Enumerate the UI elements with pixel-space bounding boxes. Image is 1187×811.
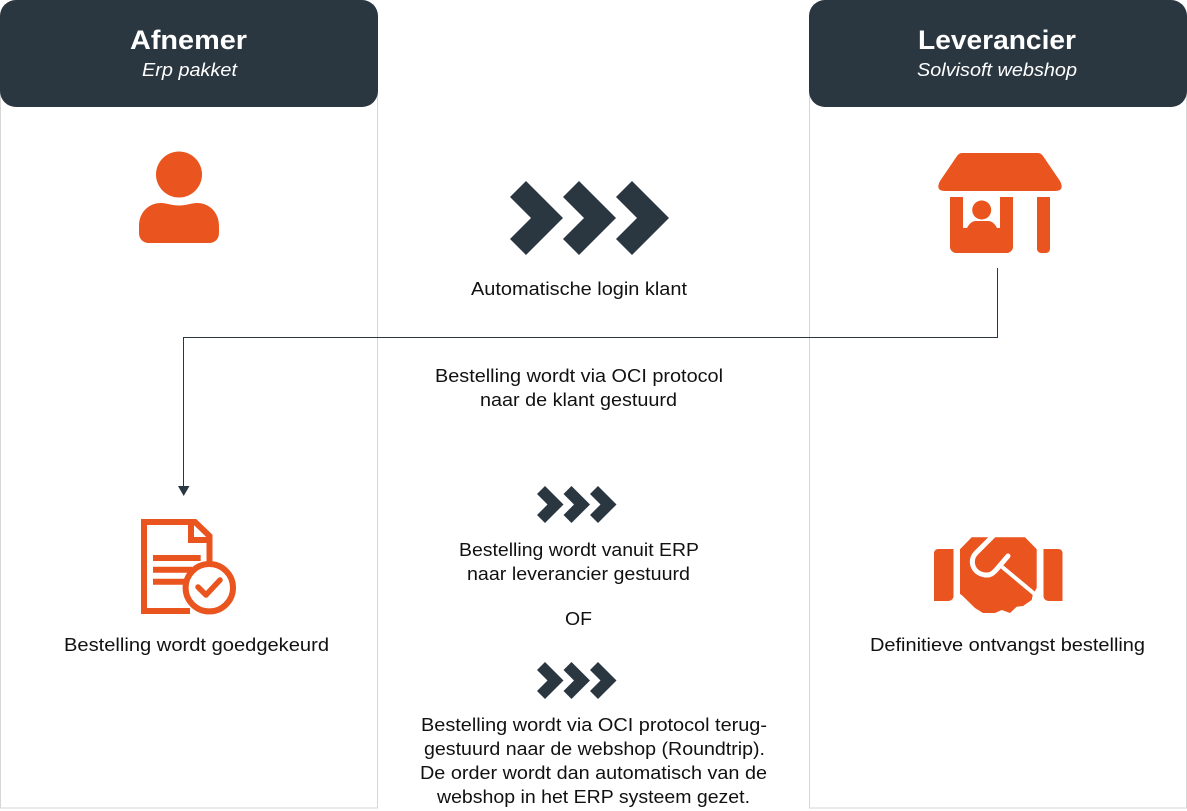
text: OF: OF bbox=[565, 609, 592, 629]
icon: small chevrons bottom bbox=[537, 662, 616, 699]
header: afnemer bbox=[0, 0, 378, 107]
text: roundtrip: gestuurd naar de webshop (Roundtrip). bbox=[424, 739, 765, 759]
arrow: stall to approval bbox=[178, 268, 998, 496]
header: afnemer: Erp pakket bbox=[142, 60, 238, 80]
text: automatische login: Automatische login klant bbox=[471, 279, 687, 299]
icon: market stall bbox=[938, 153, 1062, 253]
text: goedgekeurd: Bestelling wordt goedgekeurd bbox=[64, 635, 329, 655]
icon: document with check bbox=[144, 522, 233, 611]
header: leverancier bbox=[809, 0, 1187, 107]
icon: large chevrons bbox=[510, 181, 669, 255]
text: bestelling via OCI: naar de klant gestuurd bbox=[480, 390, 677, 410]
text: vanuit ERP bbox=[459, 540, 699, 584]
panel: afnemer bbox=[0, 0, 378, 808]
text: roundtrip: Bestelling wordt via OCI protocol terug- bbox=[421, 715, 767, 735]
header: afnemer: Afnemer bbox=[130, 25, 248, 55]
text: vanuit ERP: naar leverancier gestuurd bbox=[467, 564, 690, 584]
text: roundtrip: webshop in het ERP systeem gezet. bbox=[436, 787, 750, 807]
text: definitieve ontvangst: Definitieve ontvangst bestelling bbox=[870, 635, 1145, 655]
text: bestelling via OCI bbox=[435, 366, 723, 410]
text: bestelling via OCI: Bestelling wordt via OCI protocol bbox=[435, 366, 723, 386]
icon: small chevrons top bbox=[537, 486, 616, 523]
panel: leverancier bbox=[809, 0, 1187, 808]
text: roundtrip: De order wordt dan automatisch van de bbox=[420, 763, 767, 783]
text: vanuit ERP: Bestelling wordt vanuit ERP bbox=[459, 540, 699, 560]
icon: person bbox=[139, 152, 219, 243]
header: leverancier: Solvisoft webshop bbox=[917, 60, 1077, 80]
text: roundtrip bbox=[420, 715, 767, 807]
header: leverancier: Leverancier bbox=[918, 25, 1077, 55]
icon: handshake bbox=[934, 533, 1062, 613]
